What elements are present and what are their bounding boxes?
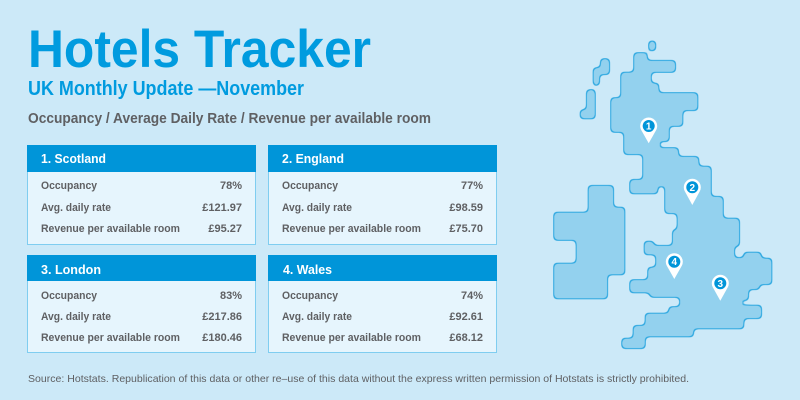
panel: Wales: Avg. daily rate (282, 311, 352, 323)
pin 3 (712, 275, 729, 301)
map: Ireland (553, 185, 625, 299)
panel: Wales: Revenue per available room (282, 332, 421, 344)
title: Hotels Tracker (28, 20, 371, 79)
pin 1: 1 (646, 122, 652, 132)
panel: England: Avg. daily rate (282, 202, 352, 214)
panel: Scotland: £95.27 (208, 223, 242, 235)
map of UK and Ireland (553, 40, 772, 349)
pin 2 (684, 179, 701, 205)
panel: Wales: £68.12 (449, 332, 483, 344)
panel header: England (268, 145, 497, 172)
panel: Scotland: Avg. daily rate (41, 202, 111, 214)
panel: London: Revenue per available room (41, 332, 180, 344)
panel: London (27, 255, 256, 352)
panel: Scotland: Occupancy (41, 180, 98, 192)
metrics line: Occupancy / Average Daily Rate / Revenue per available room (28, 111, 431, 127)
panel: Scotland: Revenue per available room (41, 223, 180, 235)
panel header: Wales (268, 255, 497, 281)
panel: England (268, 145, 497, 244)
panel header: Scotland (27, 145, 256, 172)
source note: Source: Hotstats. Republication of this data or other re–use of this data without the express written permission of Hotstats is strictly prohibited. (28, 373, 689, 385)
panel: Wales (268, 255, 497, 352)
panel: London: Avg. daily rate (41, 311, 111, 323)
panel: Wales: 74% (461, 290, 483, 302)
panel: Wales: 4. Wales (283, 262, 332, 277)
pin 3: 3 (718, 279, 724, 290)
map: Great Britain (610, 52, 772, 349)
panel: Wales: Occupancy (282, 290, 339, 302)
panel: Wales: £92.61 (449, 311, 483, 323)
panel: London: Occupancy (41, 290, 98, 302)
map: Shetland (648, 40, 656, 51)
panel: England: £75.70 (449, 223, 483, 235)
panel: Scotland: 1. Scotland (41, 151, 106, 166)
panel: Scotland: £121.97 (202, 202, 242, 214)
panel: London: £180.46 (202, 332, 242, 344)
panel: England: £98.59 (449, 202, 483, 214)
panel: England: 77% (461, 180, 483, 192)
panel: Scotland (27, 145, 256, 244)
pin 1 (640, 118, 657, 143)
panel header: London (27, 255, 256, 281)
pin 2: 2 (690, 183, 696, 194)
panel: England: Revenue per available room (282, 223, 421, 235)
panel: London: £217.86 (202, 311, 242, 323)
subtitle: UK Monthly Update —November (28, 77, 304, 100)
panel: England: 2. England (282, 151, 344, 166)
panel: London: 3. London (41, 262, 101, 277)
map: Hebrides upper (593, 58, 610, 86)
panel: Scotland: 78% (220, 180, 242, 192)
map: Hebrides lower (580, 89, 596, 119)
panel: England: Occupancy (282, 180, 339, 192)
pin 4 (666, 253, 683, 279)
pin 4: 4 (672, 257, 678, 268)
panel: London: 83% (220, 290, 242, 302)
